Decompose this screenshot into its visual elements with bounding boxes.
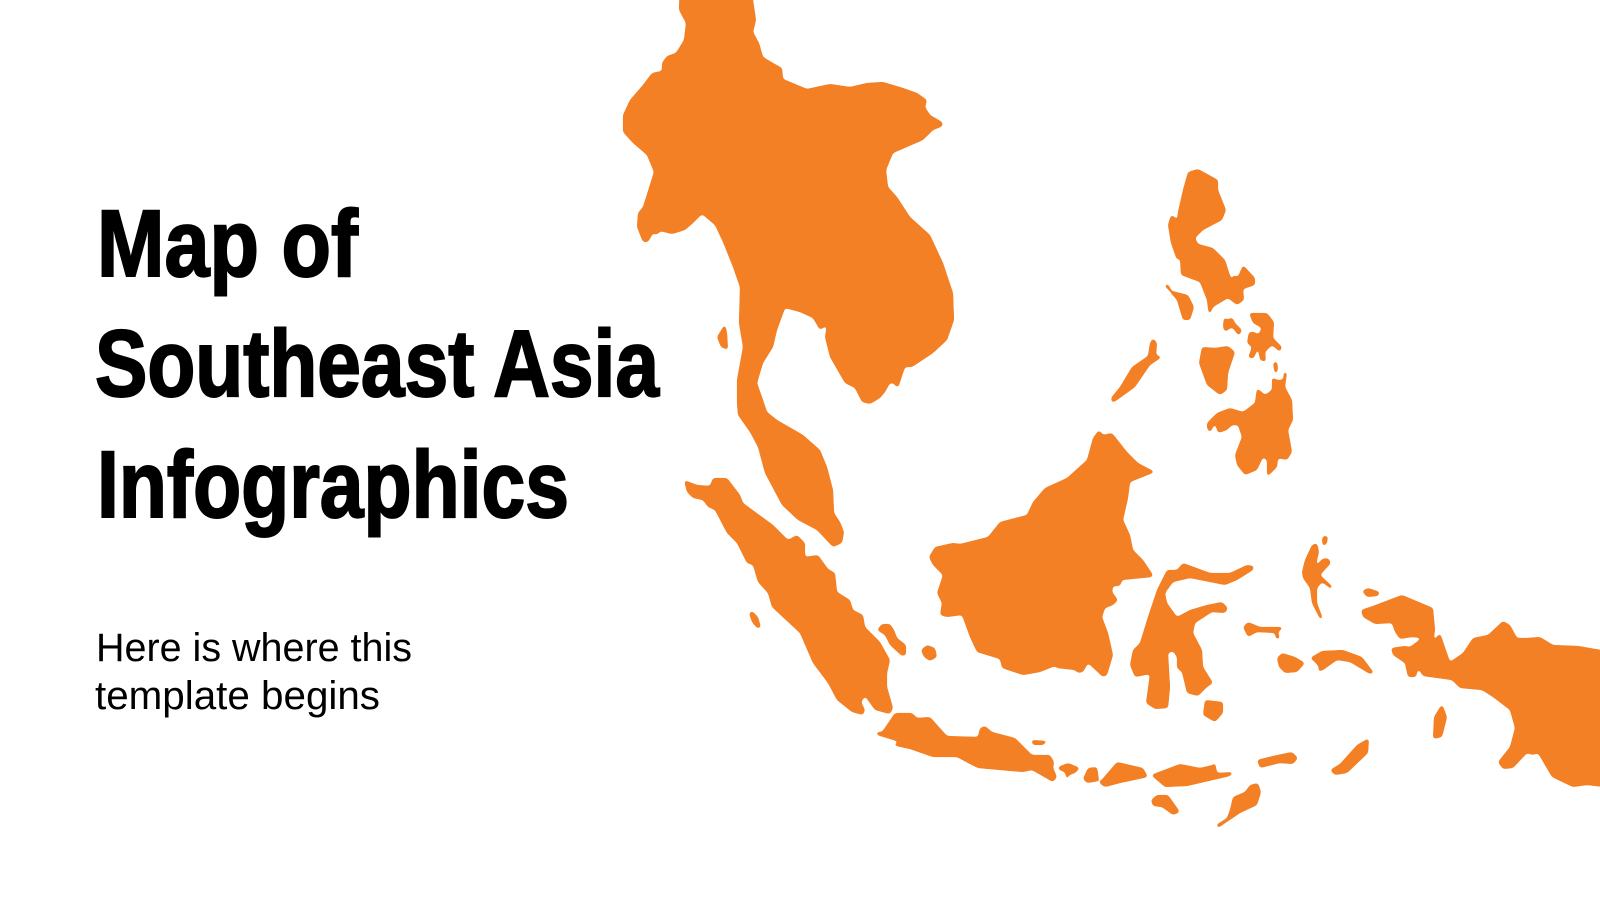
title: Infographics [97,432,569,538]
Buton [1203,700,1223,722]
Tanimbar [1330,738,1369,775]
subtitle: Here is where this [96,626,412,670]
Aru islands [1433,704,1447,739]
Palawan [1111,338,1162,403]
map of Southeast Asia [623,0,1600,828]
Sumatra [684,478,893,715]
subtitle: template begins [95,674,380,718]
Buru [1277,653,1305,673]
Sulawesi [1130,563,1254,709]
Wetar [1257,752,1298,768]
Panay [1199,346,1235,395]
subtitle [95,626,412,718]
Mindanao [1207,371,1293,477]
Madura [1031,740,1048,745]
title: Map of [97,191,358,297]
Andaman island [717,324,728,350]
Waigeo [1362,588,1380,597]
Java [876,713,1057,782]
title: Southeast Asia [95,311,660,417]
Sumbawa [1099,762,1148,787]
Bangka [877,624,906,656]
Nusa Penida [1074,777,1078,779]
title [95,191,660,538]
Bali [1058,763,1080,781]
Borneo [929,430,1155,677]
Sumba [1151,795,1180,815]
Masbate [1223,317,1242,336]
Morotai [1322,536,1328,547]
Luzon [1168,169,1255,316]
New Guinea [1361,595,1600,790]
Nias [749,611,761,628]
Timor [1216,783,1261,828]
Mindoro [1164,284,1194,320]
Sula islands [1243,622,1284,639]
Halmahera [1302,543,1333,619]
Samar and Leyte [1247,313,1282,362]
mainland Southeast Asia [623,0,954,547]
Dinagat [1273,361,1278,375]
Flores [1151,762,1234,787]
Seram [1310,650,1374,674]
Belitung [921,645,937,661]
Lombok [1083,767,1099,783]
